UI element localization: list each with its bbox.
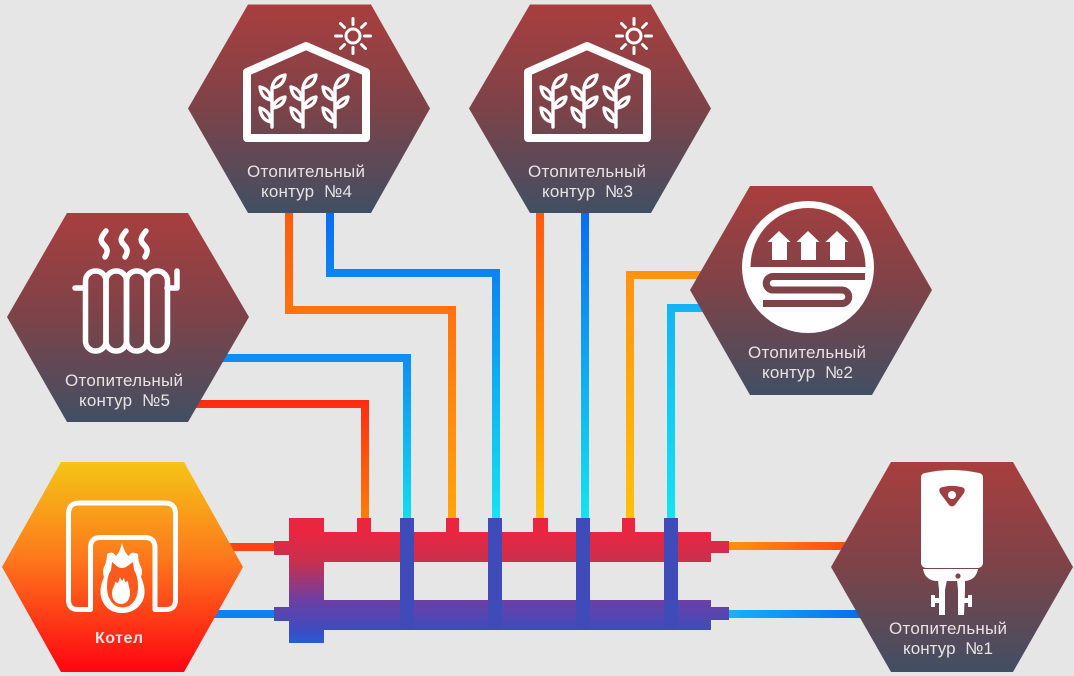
label: Отопительный xyxy=(748,343,866,362)
pipe: circuit 1 supply xyxy=(727,542,850,550)
label: Котел xyxy=(95,630,143,647)
pipe: circuit 3 supply xyxy=(536,210,544,520)
pipes: connections between manifold and circuits xyxy=(195,210,865,614)
hexagon xyxy=(831,462,1073,672)
label: контур №2 xyxy=(762,363,853,382)
panel: heating circuit 1 xyxy=(831,462,1073,672)
pipe: circuit 5 return xyxy=(222,358,407,520)
pipe: boiler supply xyxy=(225,543,276,551)
pipe: circuit 4 return xyxy=(330,210,496,520)
hexagon xyxy=(2,462,243,672)
pipe: circuit 2 supply xyxy=(630,275,705,520)
label: Отопительный xyxy=(65,371,183,390)
hexagon xyxy=(188,4,430,213)
manifold body xyxy=(274,518,729,643)
label: контур №3 xyxy=(542,182,633,201)
label: контур №1 xyxy=(903,639,993,658)
panel: heating circuit 5 xyxy=(7,213,249,422)
label: контур №5 xyxy=(79,391,170,410)
label: Отопительный xyxy=(528,162,646,181)
icon: greenhouse xyxy=(528,46,647,138)
pipe: circuit 2 return xyxy=(671,308,708,520)
manifold return risers xyxy=(400,518,678,630)
hexagon xyxy=(690,186,932,395)
panel: boiler xyxy=(2,462,243,672)
label: Отопительный xyxy=(247,162,365,181)
icon: radiator xyxy=(75,231,177,351)
icon: sun xyxy=(616,18,652,54)
icon: sun xyxy=(336,18,370,54)
icon: underfloor heating xyxy=(742,201,874,333)
pipe: circuit 3 return xyxy=(581,210,589,520)
pipe: circuit 5 supply xyxy=(195,404,365,520)
hexagon xyxy=(7,213,249,422)
label: Отопительный xyxy=(889,619,1007,638)
pipe: boiler return xyxy=(210,610,276,618)
icon: greenhouse xyxy=(247,46,366,138)
icon: water heater xyxy=(921,470,983,615)
pipe: circuit 4 supply xyxy=(289,210,452,520)
icon: boiler with flame xyxy=(68,503,176,613)
hexagon xyxy=(469,4,711,213)
panel: heating circuit 2 xyxy=(690,186,932,395)
panel: heating circuit 4 xyxy=(188,4,430,213)
hydraulic manifold xyxy=(274,518,729,643)
label: контур №4 xyxy=(261,182,352,201)
panel: heating circuit 3 xyxy=(469,4,711,213)
pipe: circuit 1 return xyxy=(727,610,865,618)
